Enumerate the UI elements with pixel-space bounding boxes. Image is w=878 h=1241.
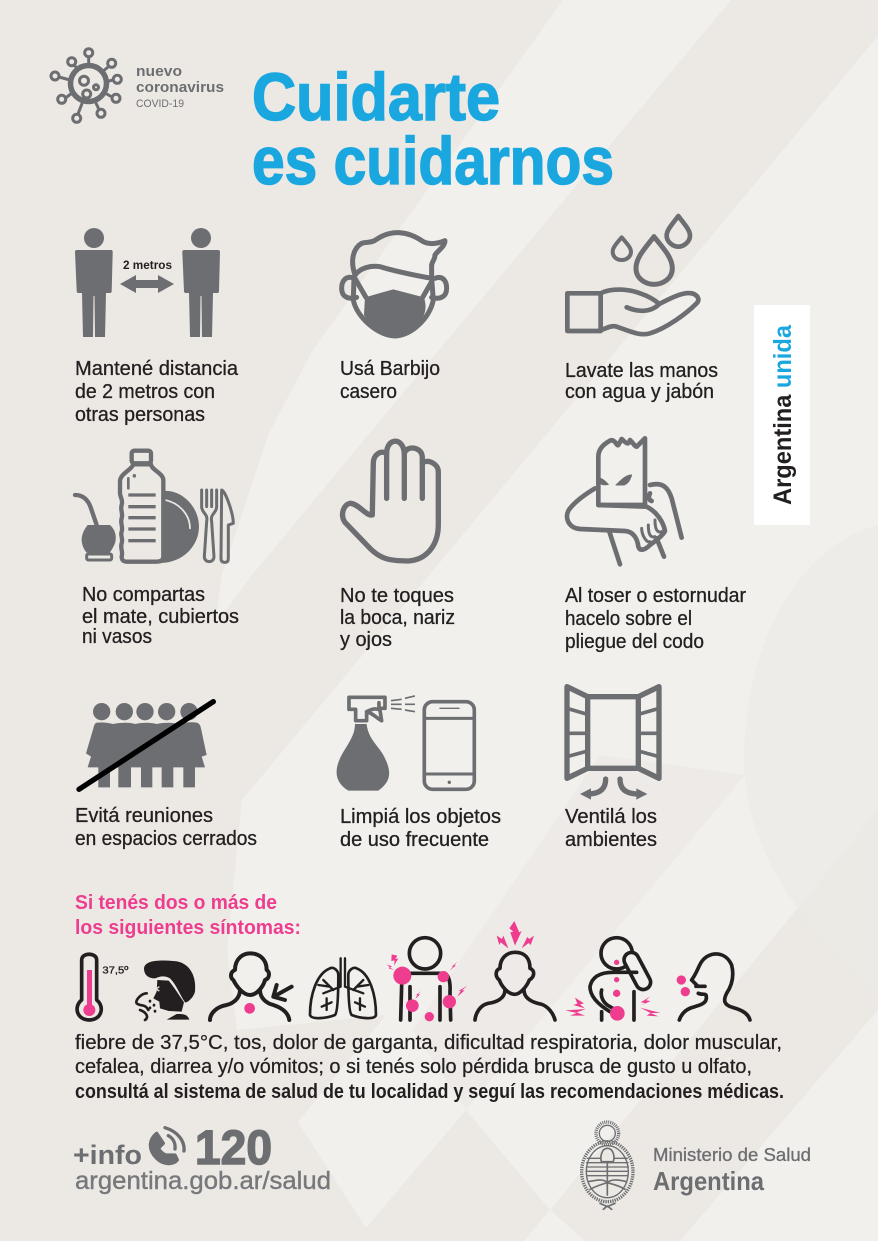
heading: síntomas: Si tenés dos o más de <box>75 892 277 914</box>
icon: lungs <box>310 958 376 1018</box>
text: Ventilá los <box>565 806 657 828</box>
title <box>252 60 614 199</box>
text: de uso frecuente <box>340 829 489 851</box>
panel: no compartir <box>75 451 239 648</box>
text: Usá Barbijo <box>340 358 440 380</box>
icon: headache <box>475 921 555 1020</box>
text <box>340 585 455 651</box>
text <box>75 805 257 850</box>
text: Limpiá los objetos <box>340 806 501 828</box>
panel: toser en el codo <box>565 438 746 653</box>
text: Al toser o estornudar <box>565 585 746 607</box>
contact info: argentina.gob.ar/salud <box>75 1167 331 1195</box>
ministry text: Ministerio de Salud <box>653 1145 811 1165</box>
emblem: escudo nacional <box>582 1122 633 1209</box>
icon: virus <box>51 49 121 122</box>
text: symptoms description: consultá al sistema de salud de tu localidad y seguí las recomendaciones médicas. <box>75 1081 784 1103</box>
icon: mate, bottle, plate and cutlery <box>75 451 233 563</box>
contact info: +info <box>73 1140 142 1170</box>
text <box>75 358 239 426</box>
text: con agua y jabón <box>565 381 714 403</box>
logo: nuevo coronavirus <box>51 49 224 122</box>
logo text: COVID-19 <box>136 98 184 110</box>
text <box>82 584 239 648</box>
text <box>340 806 501 851</box>
text: Lavate las manos <box>565 360 718 382</box>
logo text <box>136 63 224 110</box>
text <box>565 360 718 403</box>
icon: loss of taste and smell <box>677 954 750 1020</box>
icon: hand and water drops <box>567 216 698 334</box>
text: casero <box>340 381 397 403</box>
text: ambientes <box>565 829 657 851</box>
title: es cuidarnos <box>252 124 614 199</box>
icon: stomach ache <box>565 938 661 1021</box>
icon: crowd crossed out <box>79 702 213 789</box>
icon: two people two metres apart <box>75 228 220 337</box>
panel: lavado de manos <box>565 216 718 403</box>
panel: Argentina unida <box>754 305 810 525</box>
text: la boca, nariz <box>340 607 455 629</box>
icon: muscle pain <box>387 938 467 1021</box>
heading: síntomas <box>75 892 301 939</box>
text: symptoms description: cefalea, diarrea y/o vómitos; o si tenés solo pérdida brusca de gusto u olfato, <box>75 1056 752 1078</box>
title: Cuidarte <box>252 60 500 135</box>
logo text: nuevo <box>136 63 182 80</box>
icon: sore throat <box>210 953 292 1020</box>
icon: cough <box>136 961 195 1020</box>
ministry text <box>653 1145 811 1196</box>
text: hacelo sobre el <box>565 608 692 630</box>
text: symptoms description <box>75 1032 784 1103</box>
icon: thermometer <box>77 954 129 1020</box>
panel: barbijo <box>340 233 447 403</box>
icon: thermometer: 37,5º <box>102 965 129 976</box>
text: symptoms description: fiebre de 37,5°C, tos, dolor de garganta, dificultad respiratoria, dolor muscular, <box>75 1032 782 1054</box>
text: Evitá reuniones <box>75 805 213 827</box>
panel: evitar reuniones <box>75 702 257 850</box>
text: pliegue del codo <box>565 631 704 653</box>
icon: two people two metres apart: 2 metros <box>123 260 172 272</box>
panel: limpiar objetos <box>337 696 501 851</box>
text: y ojos <box>340 629 392 651</box>
icon: coughing into elbow <box>567 438 682 564</box>
text: otras personas <box>75 404 205 426</box>
text: el mate, cubiertos <box>82 606 239 628</box>
text: en espacios cerrados <box>75 828 257 850</box>
ministry text: Argentina <box>653 1166 764 1196</box>
heading: síntomas: los siguientes síntomas: <box>75 917 301 939</box>
text <box>565 806 657 851</box>
contact info: 120 <box>195 1122 272 1175</box>
text <box>340 358 440 403</box>
text: ni vasos <box>82 626 152 648</box>
symptom icons <box>77 921 750 1021</box>
panel: distancia <box>75 228 239 426</box>
text <box>565 585 746 653</box>
panel: Argentina unida: Argentina unida <box>769 324 797 505</box>
contact info <box>73 1122 331 1195</box>
text: No te toques <box>340 585 454 607</box>
icon: spray bottle and phone <box>337 696 474 791</box>
icon: phone <box>150 1128 184 1164</box>
logo text: coronavirus <box>136 79 224 96</box>
text: de 2 metros con <box>75 381 215 403</box>
panel: no te toques <box>340 441 455 651</box>
icon: face mask <box>342 233 447 337</box>
icon: open window with arrows <box>567 687 659 800</box>
icon: open hand <box>343 441 438 561</box>
text: Mantené distancia <box>75 358 239 380</box>
text: No compartas <box>82 584 205 606</box>
panel: ventilar <box>565 687 659 851</box>
